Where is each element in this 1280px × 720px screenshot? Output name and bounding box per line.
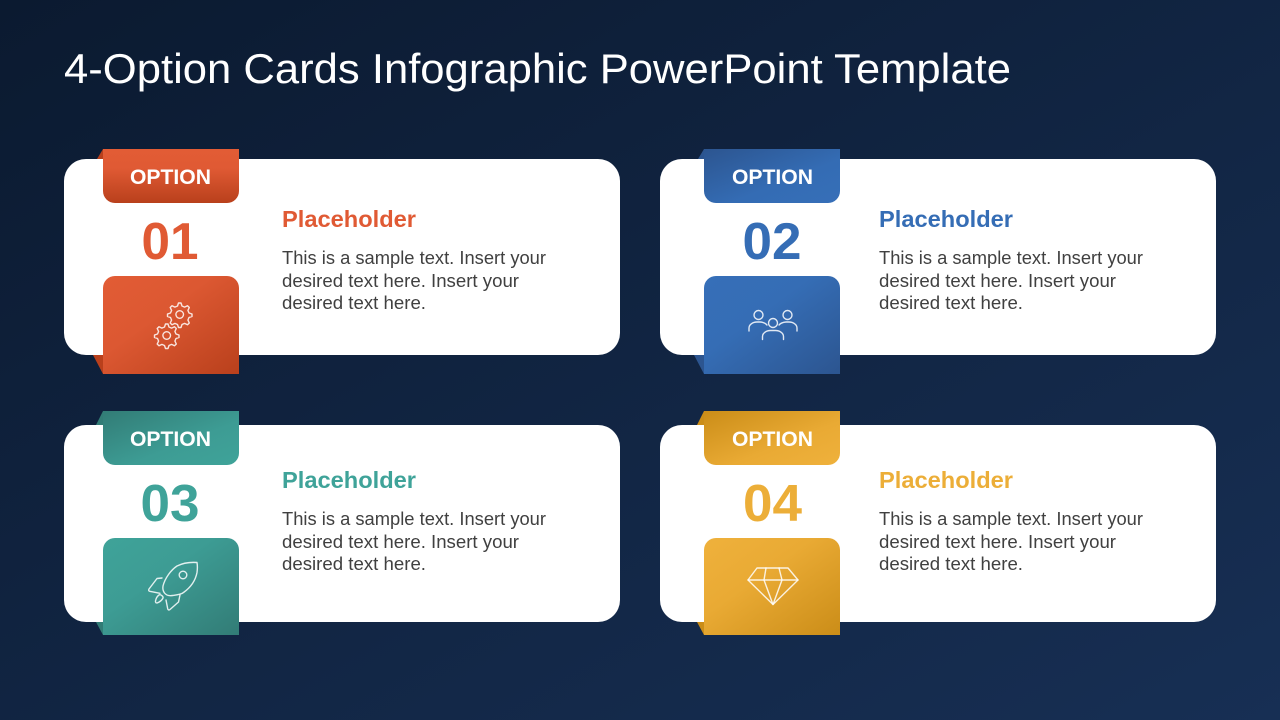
icon block 02 [704,276,840,374]
body text 04: This is a sample text. Insert your [879,508,1143,529]
icon block 03 [103,538,239,635]
bottom fold 04 [697,622,704,635]
option tab 01: OPTION [130,166,211,189]
panel: option 03 [64,411,620,635]
body text 03: This is a sample text. Insert your [282,508,546,529]
icon block 04 [704,538,840,635]
body text 02 [879,247,1143,313]
body text 01: desired text here. [282,292,426,313]
bottom fold 03 [96,622,103,635]
icon: rocket [149,562,197,610]
option tab 01 [103,149,239,203]
heading 04: Placeholder [879,467,1013,493]
body text 04: desired text here. [879,553,1023,574]
card background 02 [660,159,1216,355]
icon: gears [154,303,192,348]
card background 03 [64,425,620,622]
option tab 02 [704,149,840,203]
bottom fold 01 [93,355,103,374]
icon block 01 [103,276,239,374]
number 04: 04 [743,475,802,533]
top fold 04 [697,411,704,425]
heading 02: Placeholder [879,206,1013,232]
panel: option 01 [64,149,620,374]
body text 01: This is a sample text. Insert your [282,247,546,268]
heading 03: Placeholder [282,467,416,493]
card background 04 [660,425,1216,622]
top fold 02 [698,149,704,159]
option tab 03 [103,411,239,465]
card background 01 [64,159,620,355]
number 02: 02 [742,213,802,271]
icon: team [749,310,797,340]
body text 03: desired text here. [282,553,426,574]
panel: option 02 [660,149,1216,374]
number 03: 03 [140,475,200,533]
heading 01: Placeholder [282,206,416,232]
top fold 01 [97,149,103,159]
option tab 04: OPTION [732,428,813,451]
body text 01: desired text here. Insert your [282,270,519,291]
top fold 03 [96,411,103,425]
body text 01 [282,247,546,313]
body text 02: desired text here. Insert your [879,270,1116,291]
title: 4-Option Cards Infographic PowerPoint Template [64,45,1011,92]
body text 02: This is a sample text. Insert your [879,247,1143,268]
option tab 04 [704,411,840,465]
body text 04 [879,508,1143,574]
body text 04: desired text here. Insert your [879,531,1116,552]
body text 02: desired text here. [879,292,1023,313]
bottom fold 02 [694,355,704,374]
option tab 03: OPTION [130,428,211,451]
icon: diamond [748,568,798,604]
body text 03 [282,508,546,574]
option tab 02: OPTION [732,166,813,189]
body text 03: desired text here. Insert your [282,531,519,552]
number 01: 01 [142,213,198,271]
panel: option 04 [660,411,1216,635]
